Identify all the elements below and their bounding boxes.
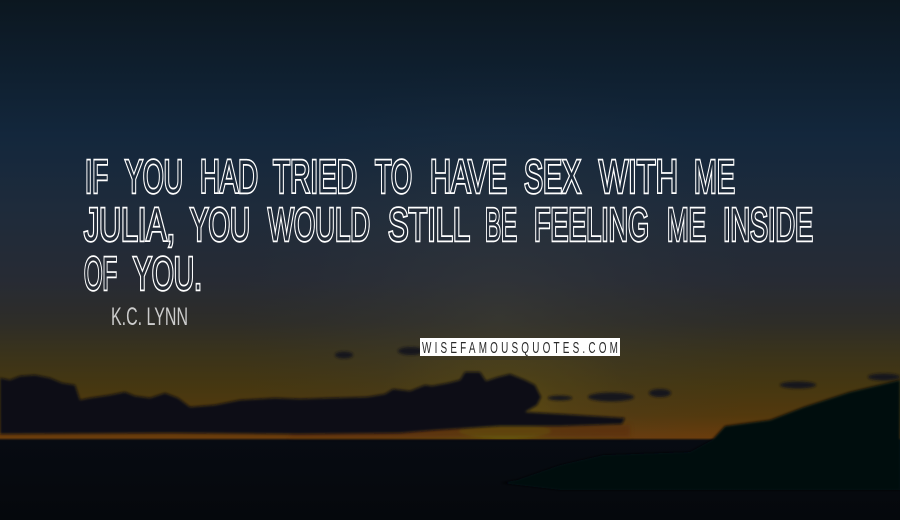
cloud bank silhouette [0,372,625,434]
quote line 3 [84,248,202,300]
quote line 2: WOULD [268,198,370,250]
small clouds [335,347,900,402]
quote text [84,150,813,300]
quote line 1: ME [694,150,735,202]
author name: K.C. LYNN [111,303,188,331]
quote line 2: STILL [388,198,470,250]
quote line 3: OF [84,248,117,300]
quote line 2: INSIDE [723,198,813,250]
hill silhouette [500,380,900,490]
red underglow beneath clouds [290,425,630,437]
quote line 2: YOU [190,198,250,250]
quote line 2: FEELING [534,198,649,250]
quote line 2: ME [667,198,706,250]
quote line 1: YOU [125,150,183,202]
quote line 3: YOU. [133,248,202,300]
sun glow on the horizon [459,424,551,438]
quote line 2 [84,198,813,250]
quote line 1: TO [375,150,412,202]
quote line 1: WITH [599,150,678,202]
quote line 1: HAD [200,150,258,202]
quote line 1 [85,150,735,202]
quote line 2: JULIA, [84,198,175,250]
watermark badge: WISEFAMOUSQUOTES.COM [422,339,618,357]
quote line 2: BE [485,198,517,250]
quote line 1: TRIED [273,150,357,202]
quote line 1: IF [85,150,108,202]
quote line 1: SEX [524,150,581,202]
quote line 1: HAVE [430,150,507,202]
